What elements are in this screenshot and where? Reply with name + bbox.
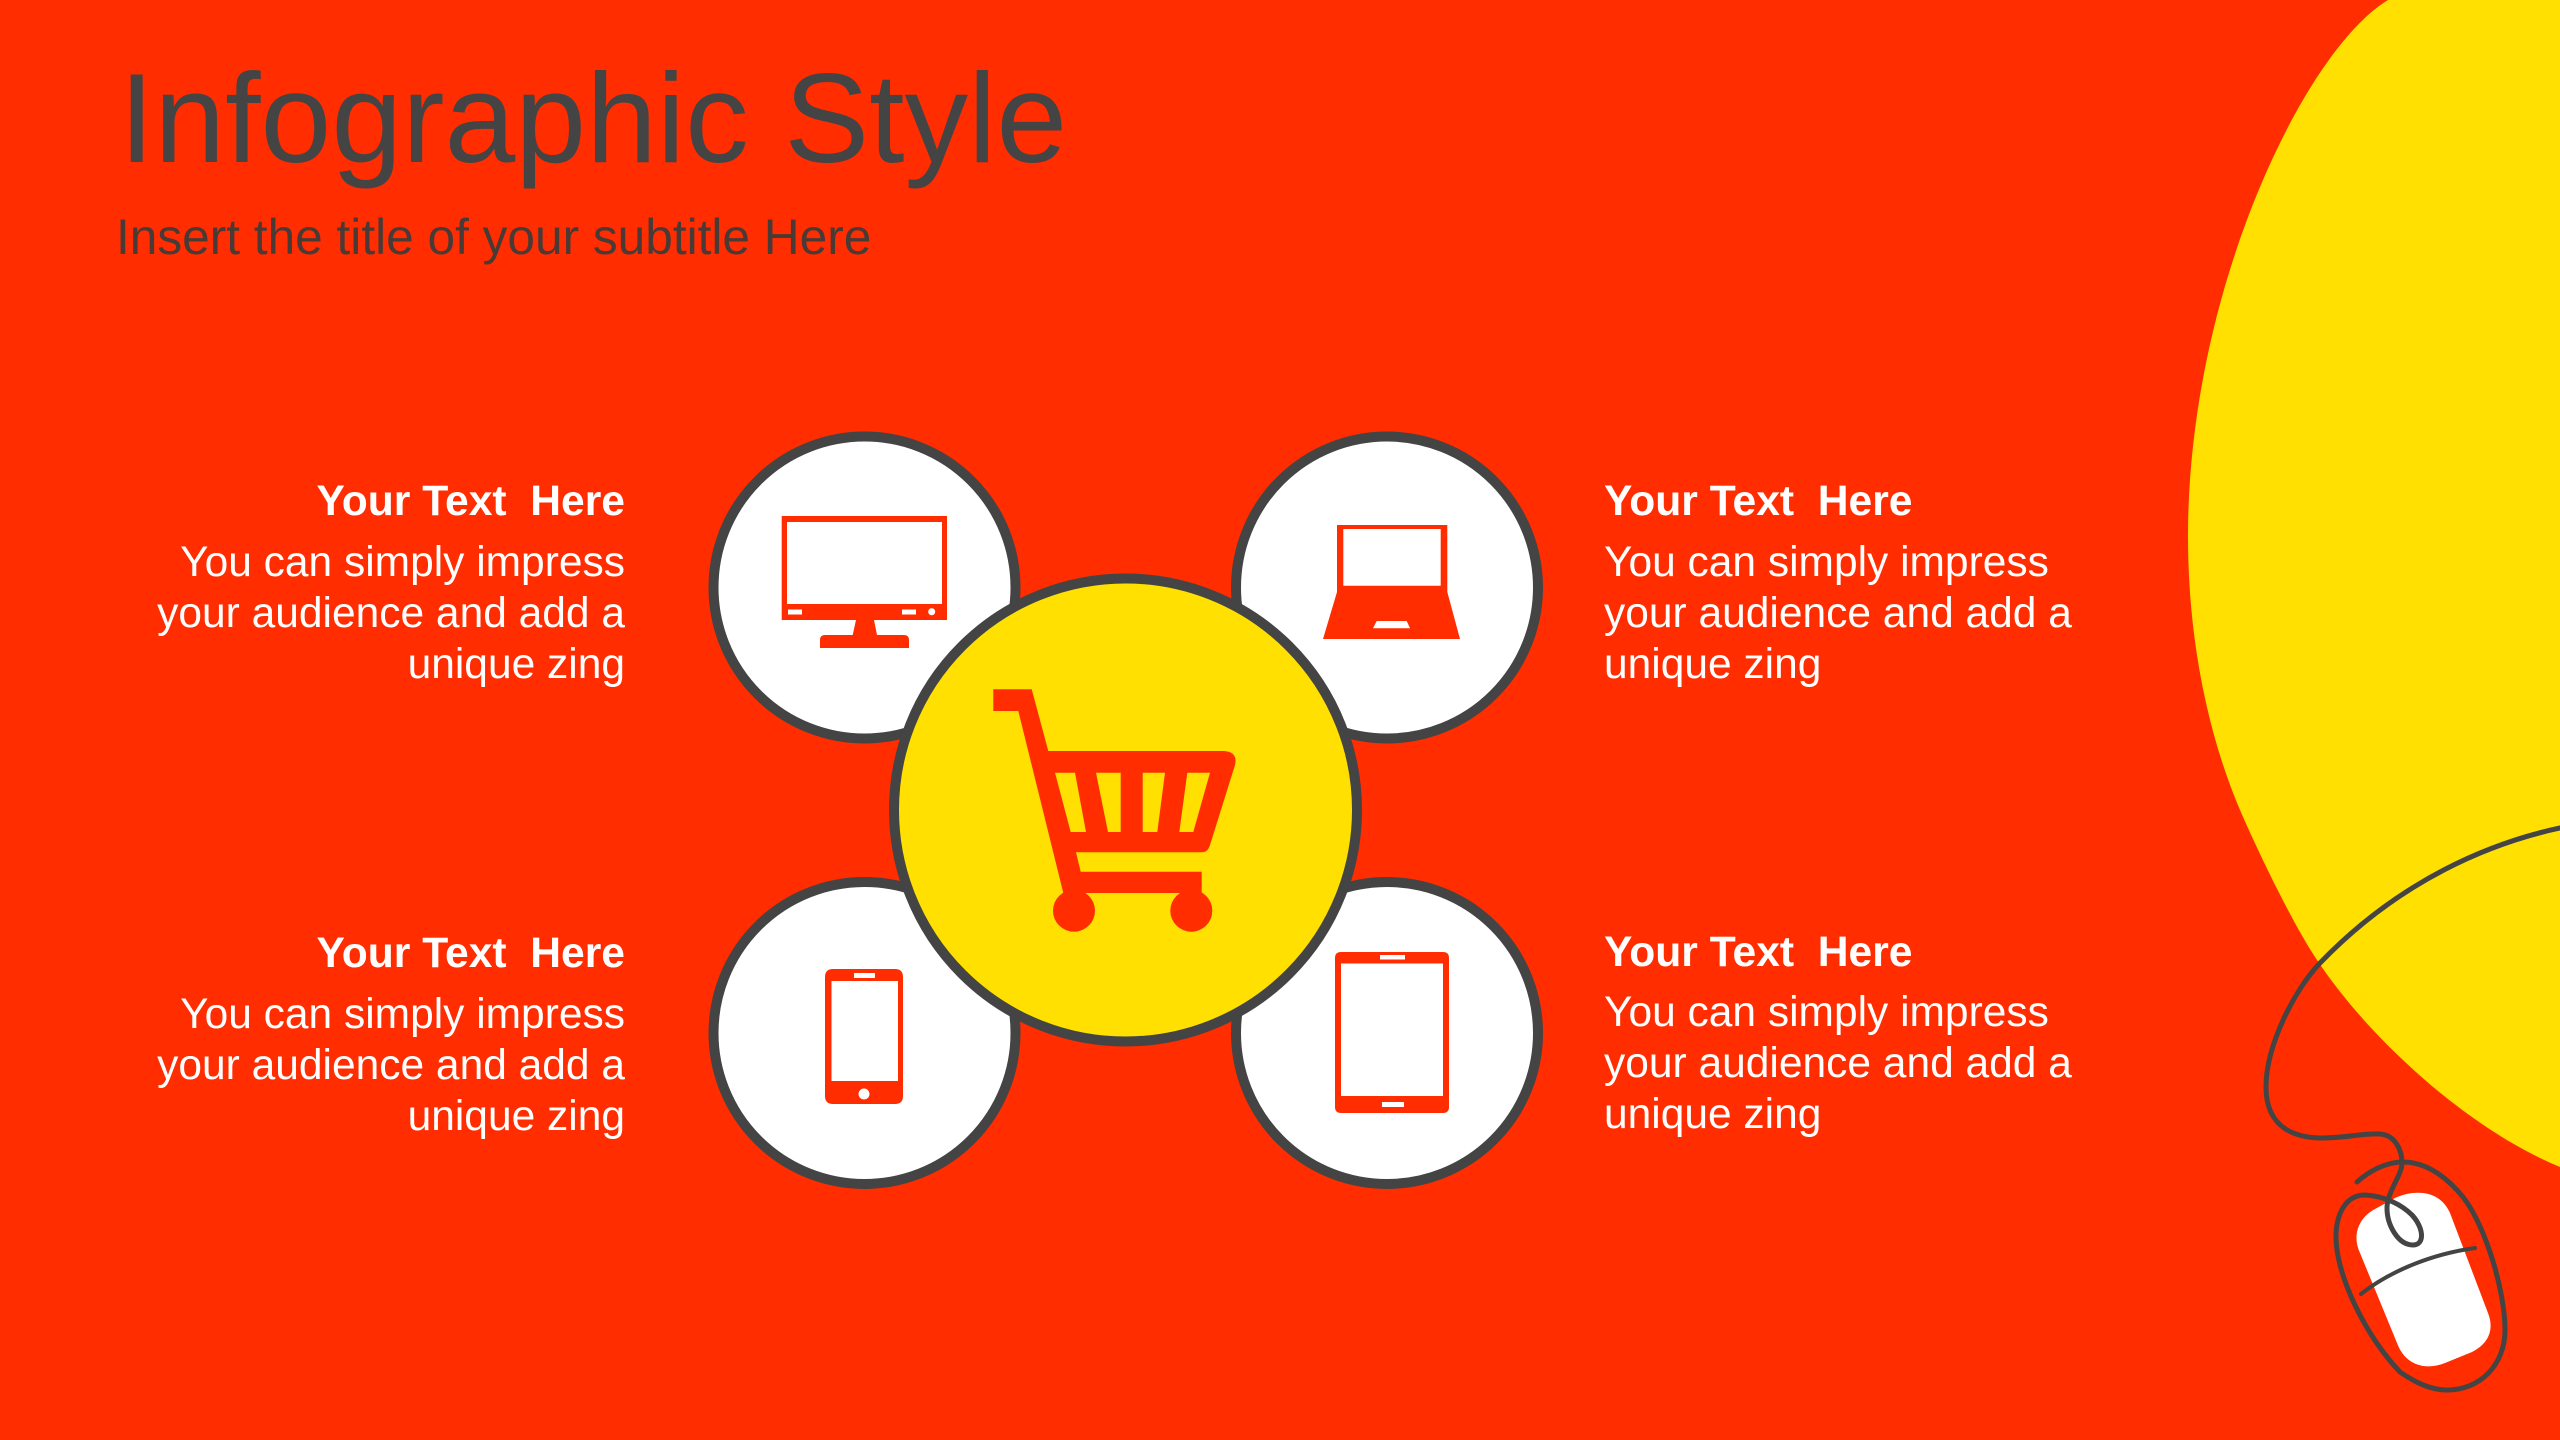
mouse cable and outline: [2266, 828, 2560, 1390]
mouse body: [2356, 1193, 2491, 1366]
text block: top left: [157, 477, 625, 688]
icon: shopping cart: [993, 689, 1236, 932]
text block: bottom right: You can simply impress: [1604, 989, 2049, 1036]
text block: bottom right: unique zing: [1604, 1091, 1821, 1138]
text block: top right: You can simply impress: [1604, 539, 2049, 586]
icon: tablet: [1335, 952, 1449, 1113]
circle: monitor: [714, 436, 1016, 738]
mouse button divider: [2361, 1248, 2475, 1294]
circle: smartphone: [714, 882, 1016, 1184]
subtitle: Insert the title of your subtitle Here: [116, 209, 871, 265]
text block: top right: [1604, 477, 2072, 688]
icon: monitor: [782, 516, 947, 648]
text block: top right: unique zing: [1604, 641, 1821, 688]
circle: laptop: [1236, 436, 1538, 738]
text block: bottom left: your audience and add a: [157, 1042, 625, 1089]
icon: laptop: [1323, 525, 1460, 639]
text block: bottom right: Your Text Here: [1604, 928, 1912, 976]
text block: top left: your audience and add a: [157, 590, 625, 637]
text block: top right: Your Text Here: [1604, 477, 1912, 525]
text block: top left: You can simply impress: [180, 539, 625, 586]
yellow background blob: [2188, 0, 2560, 1167]
icon: computer mouse: [2266, 828, 2560, 1390]
icon: smartphone: [825, 969, 903, 1104]
text block: bottom left: Your Text Here: [316, 929, 625, 977]
text block: top right: your audience and add a: [1604, 590, 2072, 637]
text block: bottom left: unique zing: [408, 1093, 625, 1140]
circle: tablet: [1236, 882, 1538, 1184]
text block: bottom right: your audience and add a: [1604, 1040, 2072, 1087]
central yellow circle: [894, 578, 1357, 1042]
text block: top left: unique zing: [408, 641, 625, 688]
title: Infographic Style: [119, 47, 1067, 189]
text block: bottom left: [157, 929, 625, 1140]
text block: bottom right: [1604, 928, 2072, 1138]
text block: top left: Your Text Here: [316, 477, 625, 525]
text block: bottom left: You can simply impress: [180, 991, 625, 1038]
